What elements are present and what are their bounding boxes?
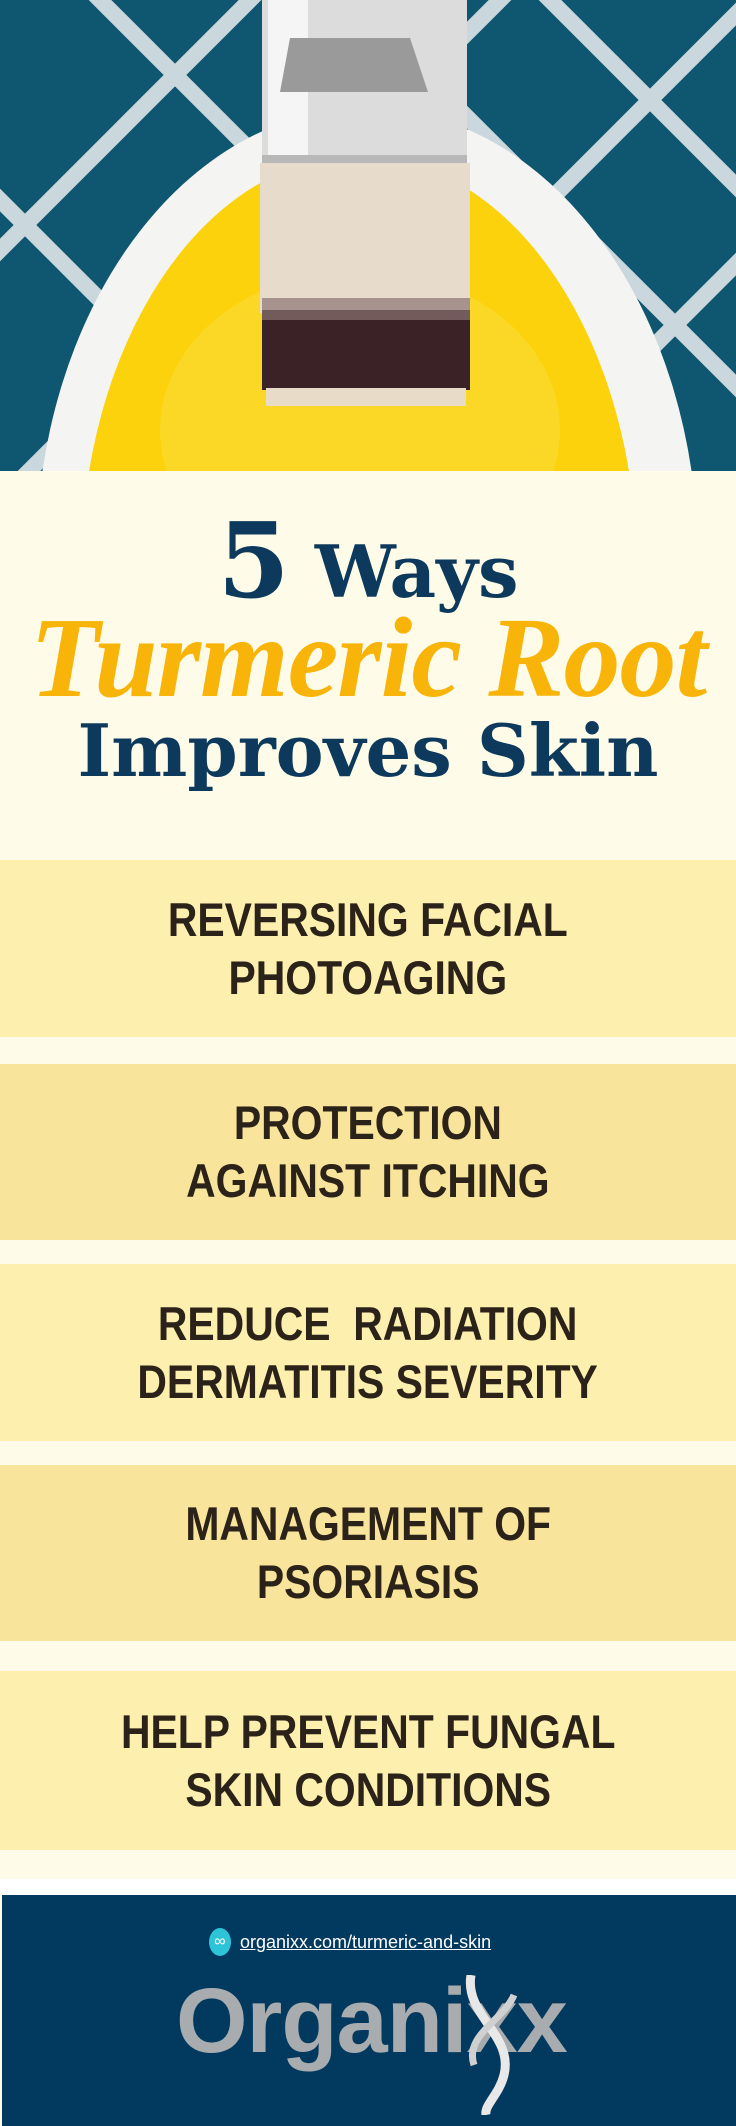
band 5 [0,1671,736,1850]
footer [2,1895,736,2126]
band 5: SKIN CONDITIONS [185,1762,551,1816]
band 4 [0,1465,736,1641]
title [30,499,710,793]
band 3: REDUCE RADIATION [158,1296,578,1350]
band 2: AGAINST ITCHING [186,1154,550,1207]
band 3: DERMATITIS SEVERITY [138,1354,598,1408]
link [209,1928,492,1956]
band 2 [0,1064,736,1240]
band 5: HELP PREVENT FUNGAL [121,1704,615,1758]
link: organixx.com/turmeric-and-skin [240,1932,491,1952]
icon: link: ∞ [214,1933,226,1950]
brush [260,0,470,406]
band 1: PHOTOAGING [229,950,507,1004]
band 4: MANAGEMENT OF [185,1497,551,1550]
band 1: REVERSING FACIAL [168,892,568,946]
icon: link [209,1928,231,1956]
band 2: PROTECTION [234,1096,502,1149]
title line 2: Turmeric Root [30,594,706,721]
title line 1: 5 Ways [217,499,519,622]
band 3 [0,1264,736,1441]
title line 3: Improves Skin [78,708,658,793]
band 1 [0,860,736,1037]
logo: Organixx [176,1970,567,2072]
photo: turmeric paste bowl with brush [0,0,736,471]
band 4: PSORIASIS [257,1555,479,1608]
